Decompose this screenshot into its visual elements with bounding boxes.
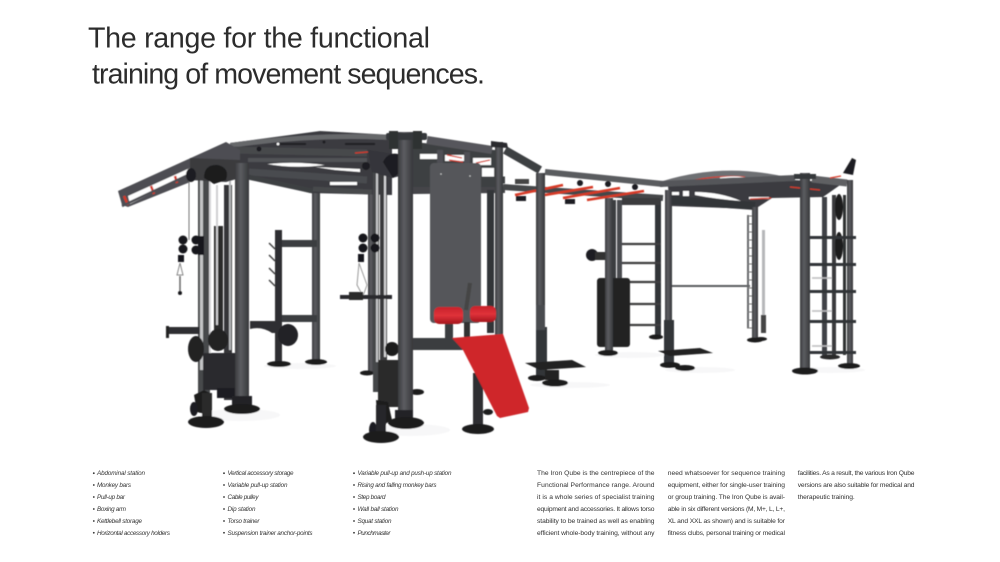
feature list: column 2: Variable pull-up station [228, 482, 288, 489]
description text: column 1: efficient whole-body training, without any [537, 530, 655, 537]
feature list: column 1: Monkey bars [97, 482, 132, 489]
feature list: column 2: Cable pulley [228, 494, 259, 501]
description text: column 2: XL and XXL as shown) and is suitable for [668, 518, 786, 525]
feature list: column 2: Vertical accessory storage [228, 470, 294, 477]
feature list: column 3: Punchmaster [358, 530, 391, 537]
description text: column 3 [798, 470, 915, 501]
post and step board: right bay front [658, 190, 713, 371]
title: The range for the functional [88, 22, 430, 54]
pull-up bar, chain storage and barbell [672, 207, 767, 342]
feature list: column 3: Variable pull-up and push-up station [358, 470, 452, 477]
section: pipe, bench post and ground feet [413, 283, 494, 434]
description text: column 2: need whatsoever for sequence training [668, 470, 785, 477]
feature list: column 2 [223, 470, 313, 537]
description text: column 1: stability to be trained as well as enabling [537, 518, 655, 525]
description text: column 2: equipment, either for single-user training [668, 482, 785, 489]
feature list: column 2: Suspension trainer anchor-points [228, 530, 313, 537]
feature list: column 3: Squat station [358, 518, 392, 525]
description text: column 2: fitness clubs, personal training or medical [668, 530, 786, 537]
feature list: column 3: Wall ball station [358, 506, 399, 513]
section: second cable pulley tower [340, 150, 406, 443]
title [88, 22, 485, 90]
feature list: column 3 [353, 470, 452, 537]
section: ladder, punch arm and heavy bag [586, 198, 663, 356]
feature list: column 1: Boxing arm [97, 506, 126, 513]
description text: column 3: therapeutic training. [798, 494, 855, 501]
feature list: column 2: Torso trainer [228, 518, 260, 525]
description text: column 2 [668, 470, 786, 537]
section: vertical panel [430, 163, 481, 323]
equipment illustration: Iron Qube rig [118, 131, 865, 443]
description text: column 3: versions are also suitable for medical and [798, 482, 915, 489]
feature list: column 1: Kettlebell storage [97, 518, 142, 525]
red inclined bench [452, 334, 529, 418]
feature list: column 2: Dip station [228, 506, 256, 513]
description text: column 2: able in six different versions (M, M+, L, L+, [668, 506, 785, 513]
red back pads [434, 306, 496, 324]
feature list: column 1: Pull-up bar [97, 494, 126, 501]
description text: column 1: it is a whole series of specialist training [537, 494, 655, 501]
post: right main column [792, 173, 818, 374]
feature list: column 1 [93, 470, 171, 537]
section: rear posts and storage, left bay [250, 182, 424, 395]
feature list: column 1: Horizontal accessory holders [97, 530, 171, 537]
post: central main column [386, 131, 427, 429]
floor shadows [200, 352, 865, 436]
section: roof, left bay [230, 131, 392, 195]
section: centre back posts [483, 141, 508, 415]
feature list: column 3: Rising and falling monkey bars [358, 482, 437, 489]
section: angled monkey bar arm [118, 142, 240, 207]
feature list: column 3: Step board [358, 494, 386, 501]
section: monkey bars with red rungs [515, 179, 644, 204]
section: centre roof and upper beams [413, 140, 663, 198]
section: left cable pulley tower [166, 158, 240, 428]
post and step board: middle [525, 173, 586, 386]
post: left main column [224, 163, 260, 414]
section: right storage tower [809, 180, 860, 369]
description text: column 1: Functional Performance range. Around [537, 482, 655, 489]
description text: column 1: The Iron Qube is the centrepiece of the [537, 470, 655, 477]
feature list: column 1: Abdominal station [96, 470, 145, 477]
description text: column 3: facilities. As a result, the various Iron Qube [798, 470, 915, 477]
section: right bay roof [660, 158, 856, 209]
description text: column 1 [537, 470, 655, 537]
description text: column 2: or group training. The Iron Qube is avail- [668, 494, 785, 501]
description text: column 1: equipment and accessories. It allows torso [537, 506, 655, 513]
title: training of movement sequences. [92, 58, 485, 90]
